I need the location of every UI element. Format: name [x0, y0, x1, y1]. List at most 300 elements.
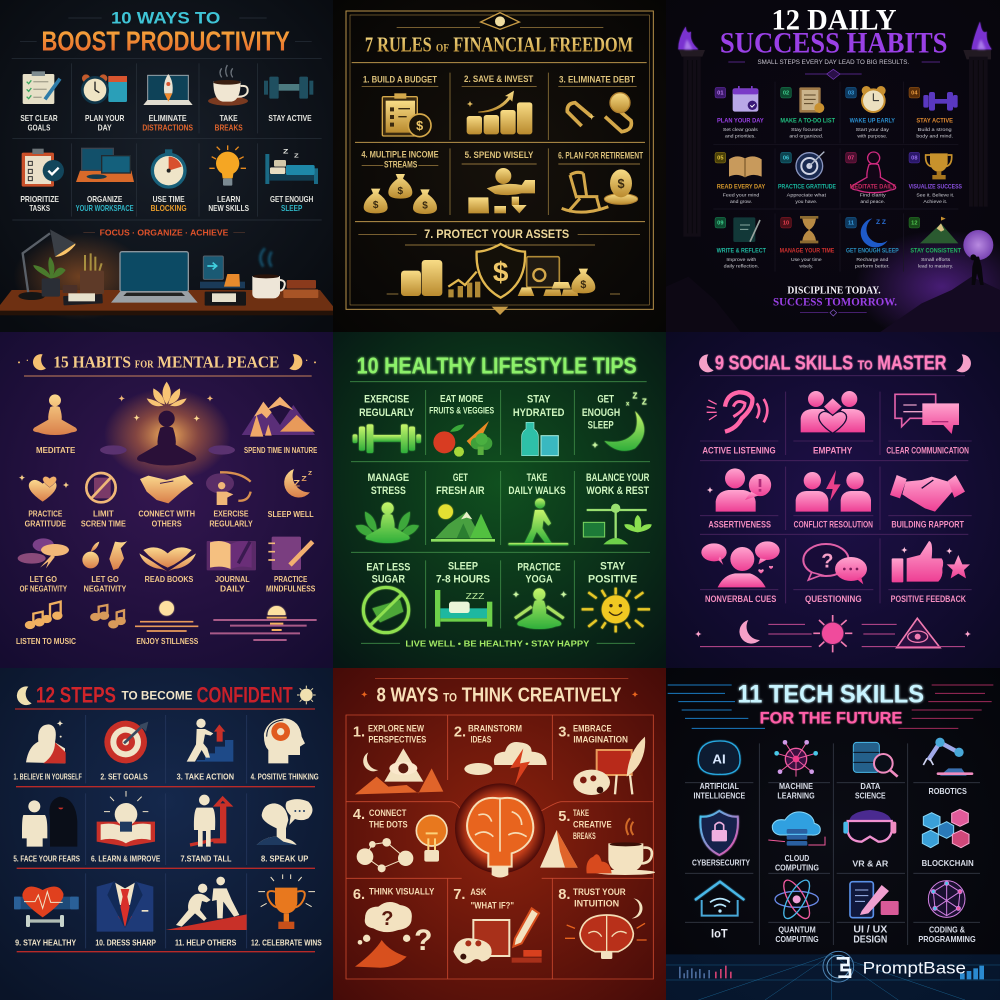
- label: building rapport: BUILDING RAPPORT: [891, 520, 964, 530]
- label: stand tall: 7.STAND TALL: [180, 854, 231, 864]
- label: let go negativity: [84, 575, 127, 594]
- icon: face your fears: [22, 797, 77, 847]
- label: organize your workspace: YOUR WORKSPACE: [76, 203, 134, 213]
- label: blockchain: BLOCKCHAIN: [922, 858, 974, 868]
- icon: questioning: [803, 544, 867, 584]
- icon: bed with zzz: [265, 148, 318, 184]
- label: 3 embrace imagination: 3.: [558, 724, 570, 740]
- label: 6 plan for retirement: 6. PLAN FOR RETIREMENT: [558, 150, 644, 160]
- tile: 07 meditate daily: 07: [848, 156, 854, 162]
- label: eat less sugar: EAT LESS: [366, 561, 410, 573]
- icon: conflict resolution: [796, 470, 871, 512]
- label: get enough sleep: [582, 394, 620, 432]
- icon: moon over water: [135, 601, 198, 631]
- icon: broken chain and coin: [567, 93, 631, 132]
- label: use time blocking: USE TIME: [153, 194, 185, 204]
- icon: music notes: [26, 602, 61, 628]
- label: journal daily: JOURNAL: [215, 575, 250, 584]
- label: machine learning: MACHINE: [779, 781, 813, 791]
- label: positive thinking: 4. POSITIVE THINKING: [251, 771, 319, 781]
- label: stay healthy: 9. STAY HEALTHY: [15, 937, 77, 947]
- label: use time blocking: [151, 194, 187, 213]
- label: stay positive: POSITIVE: [588, 574, 637, 586]
- tile: 12 stay consistent: STAY CONSISTENT: [910, 249, 961, 255]
- label: practice gratitude: [25, 510, 67, 528]
- label: get fresh air: GET: [453, 472, 468, 484]
- label: listen to music: LISTEN TO MUSIC: [16, 637, 76, 646]
- label: 2 save and invest: 2. SAVE & INVEST: [464, 74, 534, 84]
- tile: 05 read every day: Feed your mind: [723, 193, 760, 199]
- panel: 12 daily success habits: [666, 0, 1000, 343]
- icon: clock and calendar: [82, 74, 127, 103]
- label: exercise regularly: [209, 510, 253, 528]
- icon: light bulb: [209, 145, 246, 186]
- panel: 15 habits for mental peace: [0, 332, 333, 669]
- label: read books: READ BOOKS: [145, 575, 194, 584]
- tagline: discipline today: DISCIPLINE TODAY.: [787, 286, 881, 297]
- icon: stay healthy: [14, 887, 79, 927]
- label: speak up: 8. SPEAK UP: [261, 854, 309, 864]
- label: get fresh air: FRESH AIR: [436, 485, 485, 497]
- icon: rocking chair and nest egg: $: [617, 177, 625, 191]
- decor: title stars: [361, 691, 638, 698]
- icon: cloud computing: [768, 812, 825, 846]
- label: set clear goals: [20, 113, 58, 132]
- icon: protect assets group: $: [580, 279, 586, 291]
- label: assertiveness: ASSERTIVENESS: [708, 520, 771, 530]
- icon: AI brain: [698, 741, 740, 774]
- label: set clear goals: SET CLEAR: [20, 113, 58, 123]
- icon: stopwatch: [152, 149, 185, 187]
- tile: 02 make a to-do list: [780, 87, 835, 139]
- label: connect with others: [138, 510, 195, 528]
- icon: small brain and moon: [565, 898, 647, 959]
- label: cloud computing: COMPUTING: [775, 862, 819, 872]
- label: 6 think visually: [353, 887, 434, 903]
- label: stay positive: STAY: [600, 561, 626, 573]
- tile: 11 get enough sleep: Z Z: [876, 220, 886, 226]
- label: ui ux design: DESIGN: [853, 935, 887, 946]
- tile: 07 meditate daily: [846, 152, 896, 205]
- label: celebrate wins: 12. CELEBRATE WINS: [251, 937, 322, 947]
- tile: 12 stay consistent: Small efforts: [921, 257, 951, 263]
- icon: nonverbal cues: [701, 541, 780, 587]
- title: success habits: SUCCESS HABITS: [720, 28, 947, 60]
- label: 7 ask what if: ASK: [470, 887, 487, 897]
- icon: AI brain: AI: [712, 752, 726, 767]
- label: vr and ar: VR & AR: [852, 858, 889, 868]
- label: eat less sugar: [366, 561, 410, 586]
- label: believe in yourself: 1. BELIEVE IN YOURSELF: [13, 771, 82, 781]
- tile: 10 manage your time: 10: [783, 221, 789, 227]
- icon: target: [104, 721, 148, 763]
- icon: believe in yourself: [26, 720, 66, 763]
- icon: crescent moon: Z: [642, 397, 647, 406]
- label: take breaks: TAKE: [220, 113, 238, 123]
- label: 1 build a budget: 1. BUILD A BUDGET: [363, 74, 437, 84]
- label: 6 think visually: THINK VISUALLY: [369, 887, 434, 897]
- label: get enough sleep: ENOUGH: [582, 407, 620, 419]
- label: artificial intelligence: INTELLIGENCE: [693, 791, 745, 801]
- tile: 05 read every day: and grow.: [730, 199, 752, 205]
- icon: sleep moon: [284, 469, 313, 498]
- icon: coffee cup: [208, 65, 248, 106]
- icon: protect assets group: [401, 244, 595, 298]
- label: 1 explore new perspectives: EXPLORE NEW: [368, 723, 424, 733]
- icon: storm clouds: [464, 742, 547, 785]
- label: data science: [855, 781, 886, 801]
- label: data science: SCIENCE: [855, 791, 886, 801]
- label: stay hydrated: HYDRATED: [513, 407, 565, 419]
- tile: 09 write and reflect: 09: [717, 221, 723, 227]
- icon: sleep moon: Z: [301, 474, 307, 483]
- label: exercise regularly: REGULARLY: [209, 519, 253, 528]
- label: data science: DATA: [860, 781, 881, 791]
- label: plan your day: [85, 113, 124, 132]
- icon: handshake: [140, 475, 193, 503]
- icon: no sugar: [363, 587, 409, 633]
- tile: 04 stay active: body and mind.: [916, 133, 953, 139]
- icon: title moon: [17, 686, 32, 705]
- tile: 10 manage your time: Use your time: [791, 257, 822, 263]
- label: 2 brainstorm ideas: 2.: [454, 724, 466, 740]
- label: face your fears: 5. FACE YOUR FEARS: [13, 854, 80, 864]
- label: artificial intelligence: [693, 781, 745, 801]
- label: clear communication: CLEAR COMMUNICATION: [886, 446, 969, 456]
- label: eat more fruits and veggies: [429, 394, 494, 416]
- title: confident: CONFIDENT: [197, 683, 293, 708]
- tile: 03 wake up early: WAKE UP EARLY: [850, 119, 895, 125]
- label: iot: IoT: [711, 927, 728, 941]
- label: eat more fruits and veggies: FRUITS & VEGGIES: [429, 406, 494, 416]
- label: practice yoga: PRACTICE: [517, 561, 561, 573]
- label: 7 ask what if: [453, 887, 514, 910]
- title: 11 tech skills: 11 TECH SKILLS: [737, 681, 924, 709]
- title: 8 ways to think creatively: 8 WAYS TO THINK CREATIVELY: [376, 685, 621, 707]
- tile: 05 read every day: 05: [717, 156, 723, 162]
- tile: 01 plan your day: 01: [717, 91, 723, 97]
- label: 5 take creative breaks: 5.: [558, 809, 570, 825]
- label: 2 brainstorm ideas: [454, 723, 522, 744]
- icon: open book with heart: [139, 547, 196, 572]
- label: 8 trust your intuition: [558, 887, 626, 909]
- label: eat more fruits and veggies: EAT MORE: [440, 394, 484, 405]
- tile: 05 read every day: [715, 152, 765, 205]
- panel: 8 ways to think creatively: [333, 668, 667, 1000]
- icon: organized workspace: [76, 148, 134, 182]
- label: journal daily: DAILY: [220, 585, 245, 594]
- label: eliminate distractions: ELIMINATE: [149, 113, 187, 123]
- label: machine learning: [777, 781, 815, 801]
- tile: 09 write and reflect: WRITE & REFLECT: [717, 249, 766, 255]
- icon: dress sharp: [97, 882, 153, 932]
- label: 4 multiple income streams: STREAMS: [384, 159, 417, 169]
- label: let go of negativity: OF NEGATIVITY: [20, 585, 68, 594]
- label: set clear goals: GOALS: [28, 122, 51, 132]
- illustration: central meditator with lotus: [100, 382, 235, 482]
- tile: 09 write and reflect: [715, 217, 766, 269]
- label: limit screen time: LIMIT: [93, 510, 114, 519]
- label: eliminate distractions: [142, 113, 193, 132]
- label: positive feedback: POSITIVE FEEDBACK: [891, 594, 966, 604]
- icon: money bags: [364, 174, 437, 214]
- label: empathy: EMPATHY: [813, 446, 852, 456]
- label: balance your work and rest: BALANCE YOUR: [586, 472, 649, 484]
- label: 3 embrace imagination: IMAGINATION: [573, 734, 628, 744]
- icon: rocking chair and nest egg: [562, 169, 638, 212]
- icon: palette and pencil: [453, 908, 542, 964]
- icon: title sun: [297, 686, 316, 704]
- label: take breaks: BREAKS: [215, 122, 243, 132]
- label: 7 ask what if: "WHAT IF?": [471, 900, 514, 910]
- label: 1 explore new perspectives: 1.: [353, 724, 365, 740]
- icon: apple and figure: [82, 541, 127, 570]
- tile: 11 get enough sleep: perform better.: [855, 263, 890, 269]
- icon: tablet and pencil: [850, 882, 899, 918]
- label: 6 think visually: 6.: [353, 887, 365, 903]
- tile: 01 plan your day: and priorities.: [725, 133, 756, 139]
- label: let go of negativity: [20, 575, 68, 594]
- label: stay hydrated: STAY: [527, 394, 551, 406]
- icon: dumbbell: [353, 424, 421, 453]
- icon: stand tall: [190, 795, 229, 847]
- tile: 08 visualize success: VISUALIZE SUCCESS: [909, 184, 962, 190]
- label: 4 connect the dots: [353, 807, 408, 829]
- icon: connected dots: [357, 838, 413, 872]
- tagline: live well be healthy stay happy: LIVE WELL • BE HEALTHY • STAY HAPPY: [405, 638, 590, 648]
- icon: money bags: $: [398, 186, 404, 197]
- label: use time blocking: BLOCKING: [151, 203, 187, 213]
- icon: walking person: [508, 498, 568, 545]
- label: cloud computing: [775, 853, 819, 872]
- icon: crescent moon: [592, 391, 647, 451]
- label: 4 connect the dots: CONNECT: [369, 808, 407, 818]
- label: get enough sleep: SLEEP: [588, 420, 614, 432]
- icon: hand with coin, bag and arrow: [468, 168, 535, 213]
- illustration: mountains and moon: [666, 230, 1000, 343]
- icon: blockchain cubes: [922, 809, 969, 848]
- label: machine learning: LEARNING: [777, 791, 815, 801]
- tile: 01 plan your day: Set clear goals: [723, 127, 758, 133]
- subtitle: SMALL STEPS EVERY DAY LEAD TO BIG RESULTS.: [757, 60, 910, 66]
- label: take daily walks: [508, 472, 566, 497]
- icon: title crescents: [18, 354, 316, 370]
- label: sleep 7-8 hours: SLEEP: [448, 561, 478, 573]
- label: 5 take creative breaks: TAKE: [573, 808, 589, 818]
- tile: 06 practice gratitude: 06: [783, 156, 789, 162]
- title: 10 healthy lifestyle tips: 10 HEALTHY LIFESTYLE TIPS: [357, 352, 637, 378]
- icon: bed: ZZZ: [466, 591, 485, 601]
- icon: speech bubbles: [895, 394, 959, 434]
- decor: circuit lines: [668, 685, 993, 728]
- tile: 10 manage your time: wisely.: [799, 263, 813, 269]
- label: let go negativity: NEGATIVITY: [84, 585, 127, 594]
- label: learn new skills: [208, 194, 249, 213]
- tile: 08 visualize success: See it. Believe it.: [916, 193, 954, 199]
- label: 4 multiple income streams: [361, 150, 439, 169]
- tile: 04 stay active: [909, 87, 958, 139]
- icon: help others: [166, 877, 247, 930]
- icon: celebrate wins: [258, 874, 315, 929]
- label: prioritize tasks: PRIORITIZE: [20, 194, 59, 204]
- label: prioritize tasks: TASKS: [29, 203, 50, 213]
- icon: shield lock: [700, 811, 738, 855]
- tile: 06 practice gratitude: [778, 152, 836, 205]
- label: quantum computing: QUANTUM: [778, 925, 816, 935]
- label: learn and improve: 6. LEARN & IMPROVE: [91, 854, 161, 864]
- icon: sleep moon: Z: [308, 471, 313, 477]
- icon: clouds and bolt: [18, 538, 69, 568]
- title: for the future: FOR THE FUTURE: [760, 709, 902, 728]
- label: limit screen time: SCREN TIME: [81, 519, 126, 528]
- icon: thought bubble question: [355, 902, 432, 968]
- label: set goals: 2. SET GOALS: [100, 771, 148, 781]
- icon: dumbbell: [264, 77, 313, 99]
- label: get enough sleep: GET ENOUGH: [270, 194, 313, 204]
- icon: data science: [853, 742, 898, 777]
- label: enjoy stillness: ENJOY STILLNESS: [136, 637, 199, 646]
- icon: exercise figure with cloud: [206, 472, 251, 505]
- title: 7 rules of financial freedom: 7 RULES OF FINANCIAL FREEDOM: [365, 35, 633, 57]
- icon: robot arm: [923, 738, 973, 776]
- title: 15 habits for mental peace: 15 HABITS FOR MENTAL PEACE: [53, 352, 279, 371]
- icon: balance scale: [583, 504, 652, 544]
- icon: thumbs up: [892, 541, 970, 582]
- icon: glowing bulb: [416, 815, 447, 862]
- tile: 11 get enough sleep: [846, 217, 899, 269]
- label: cloud computing: CLOUD: [785, 853, 809, 863]
- icon: bed: [435, 590, 492, 627]
- label: 3 eliminate debt: 3. ELIMINATE DEBT: [559, 74, 635, 84]
- icon: yoga pose: [513, 588, 567, 629]
- icon: take action: [187, 719, 233, 762]
- decor: moon sun eye ornament: [695, 615, 971, 652]
- icon: money bags: $: [422, 201, 428, 212]
- label: 1 explore new perspectives: PERSPECTIVES: [368, 734, 426, 744]
- label: get fresh air: [436, 472, 485, 497]
- label: 8 trust your intuition: INTUITION: [574, 899, 619, 909]
- label: 5 take creative breaks: CREATIVE: [573, 820, 612, 830]
- label: sleep 7-8 hours: 7-8 HOURS: [436, 574, 490, 586]
- icon: handshake: [890, 475, 965, 512]
- label: quantum computing: [775, 925, 819, 944]
- tile: 01 plan your day: [715, 86, 764, 139]
- icon: notebook and pencil: [268, 537, 313, 570]
- icon: heart: [19, 474, 69, 502]
- label: sleep 7-8 hours: [436, 561, 490, 586]
- icon: questioning: ?: [821, 550, 833, 572]
- label: 8 trust your intuition: 8.: [558, 887, 570, 903]
- title: 12 steps: 12 STEPS: [36, 683, 116, 708]
- label: stay hydrated: [513, 394, 565, 419]
- label: questioning: QUESTIONING: [805, 594, 862, 604]
- icon: mountains: [242, 397, 315, 437]
- label: 2 brainstorm ideas: IDEAS: [471, 734, 491, 744]
- label: plan your day: PLAN YOUR: [85, 113, 124, 123]
- label: 3 embrace imagination: EMBRACE: [573, 723, 612, 733]
- decor: glow bars and floor grid: [666, 950, 1000, 1000]
- icon: budget clipboard: [382, 93, 431, 137]
- icon: empathy: [801, 391, 865, 433]
- label: 1 explore new perspectives: [353, 723, 426, 744]
- tile: 03 wake up early: with purpose.: [857, 133, 887, 139]
- icon: smiling sun: [582, 588, 650, 632]
- panel: 10 ways to boost productivity: [0, 0, 333, 333]
- label: let go negativity: LET GO: [91, 575, 119, 584]
- icon: no screen: [86, 473, 116, 502]
- panel: 10 healthy lifestyle tips: [333, 332, 667, 669]
- tile: 07 meditate daily: MEDITATE DAILY: [850, 184, 896, 190]
- icon: bottle and glass: [522, 422, 558, 456]
- tagline: success tomorrow: SUCCESS TOMORROW.: [773, 297, 897, 309]
- tile: 09 write and reflect: daily reflection.: [724, 263, 759, 269]
- tagline: focus organize achieve: FOCUS · ORGANIZE · ACHIEVE: [100, 227, 229, 237]
- label: prioritize tasks: [20, 194, 59, 213]
- label: exercise regularly: [359, 394, 415, 419]
- illustration: central brain bulb: [455, 783, 545, 877]
- icon: clipboard checklist: [23, 71, 60, 104]
- label: nonverbal cues: NONVERBAL CUES: [705, 594, 776, 604]
- icon: music notes 2: [91, 605, 125, 627]
- label: learn new skills: NEW SKILLS: [208, 203, 249, 213]
- label: 5 spend wisely: 5. SPEND WISELY: [465, 150, 533, 160]
- label: quantum computing: COMPUTING: [775, 934, 819, 944]
- icon: right pillar with flame: [963, 22, 992, 207]
- tile: 06 practice gratitude: Appreciate what: [787, 193, 827, 199]
- icon: fingerprint brain logo: [823, 951, 854, 982]
- panel: 11 tech skills for the future: [666, 668, 1000, 1000]
- tile: 08 visualize success: [909, 152, 962, 205]
- label: cybersecurity: CYBERSECURITY: [692, 857, 750, 867]
- label: balance your work and rest: [586, 472, 649, 497]
- watermark: promptbase: PromptBase: [863, 958, 966, 977]
- label: take breaks: [215, 113, 243, 132]
- tile: 06 practice gratitude: PRACTICE GRATITUDE: [778, 184, 836, 190]
- label: meditate: MEDITATE: [36, 446, 76, 455]
- label: eliminate distractions: DISTRACTIONS: [142, 122, 193, 132]
- label: practice gratitude: PRACTICE: [28, 510, 63, 519]
- icon: learn and improve: [97, 791, 155, 847]
- icon: positive thinking: [264, 718, 305, 763]
- icon: coffee and pyramid: [540, 818, 655, 875]
- tile: 02 make a to-do list: and organized.: [789, 133, 823, 139]
- icon: crescent moon: x: [626, 402, 630, 408]
- label: 4 multiple income streams: 4. MULTIPLE INCOME: [361, 150, 439, 160]
- illustration: desk scene: [0, 229, 333, 320]
- title: to become: TO BECOME: [121, 688, 193, 702]
- icon: sunset scene: [210, 606, 317, 640]
- label: 4 connect the dots: THE DOTS: [369, 819, 408, 829]
- label: manage stress: STRESS: [371, 485, 406, 497]
- label: learn new skills: LEARN: [217, 194, 240, 204]
- icon: eye pyramid mountains: [355, 748, 443, 794]
- label: dress sharp: 10. DRESS SHARP: [95, 937, 156, 947]
- tile: 10 manage your time: MANAGE YOUR TIME: [780, 249, 834, 255]
- label: coding and programming: CODING &: [929, 925, 965, 935]
- tile: 04 stay active: Build a strong: [918, 127, 952, 133]
- icon: protect assets group: $: [493, 257, 509, 288]
- label: help others: 11. HELP OTHERS: [175, 937, 237, 947]
- icon: smart home: [695, 882, 744, 916]
- icon: bed with zzz: Z: [294, 153, 299, 159]
- label: exercise regularly: EXERCISE: [213, 510, 249, 519]
- label: practice mindfulness: PRACTICE: [274, 575, 308, 584]
- tile: 04 stay active: STAY ACTIVE: [916, 119, 953, 125]
- tile: 12 stay consistent: lead to mastery.: [918, 263, 953, 269]
- tile: 12 stay consistent: [909, 217, 961, 269]
- icon: thought bubble question: ?: [414, 924, 432, 957]
- label: connect with others: OTHERS: [152, 519, 182, 528]
